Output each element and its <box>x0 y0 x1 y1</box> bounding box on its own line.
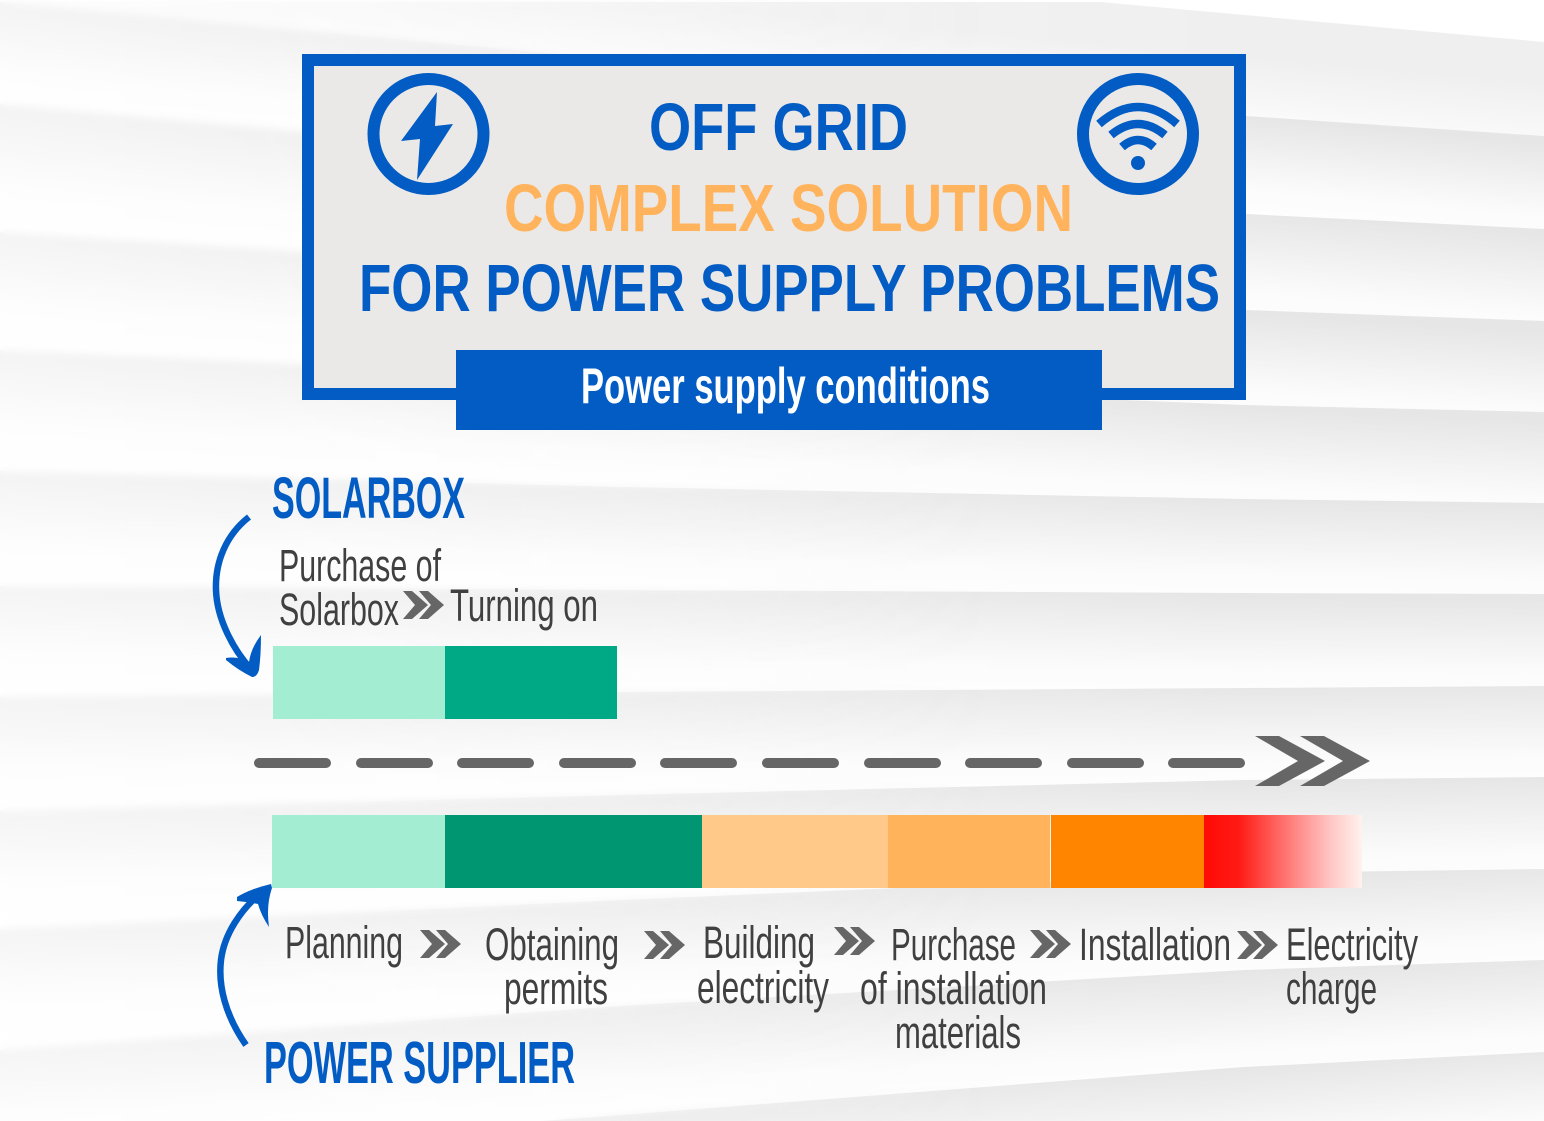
arrow: solarbox to bar <box>216 517 261 677</box>
chevron: after building electricity <box>834 927 875 955</box>
step label: building electricity: Building <box>703 917 815 968</box>
step label: obtaining permits: permits <box>504 963 608 1014</box>
chevron: purchase to turning on <box>403 591 444 619</box>
step label: turning on: Turning on <box>450 580 598 631</box>
step label: obtaining permits <box>485 919 619 1014</box>
banner: power supply conditions: Power supply conditions <box>581 358 990 414</box>
bar: solarbox purchase segment <box>273 646 445 719</box>
chevron: after planning <box>420 930 461 958</box>
step label: purchase of solarbox <box>279 540 441 635</box>
step label: electricity charge: Electricity <box>1286 919 1418 970</box>
step label: purchase of installation materials: Purchase <box>891 919 1016 970</box>
step label: installation: Installation <box>1079 919 1231 970</box>
step label: obtaining permits: Obtaining <box>485 919 619 970</box>
step label: purchase of installation materials <box>860 919 1047 1058</box>
icon: lightning bolt in circle <box>374 79 484 189</box>
heading: power supplier: POWER SUPPLIER <box>264 1030 575 1096</box>
dashed timeline arrow <box>254 736 1370 786</box>
step label: purchase of installation materials: materials <box>895 1007 1021 1058</box>
bar: power supplier stages <box>272 815 1362 888</box>
banner: power supply conditions <box>456 350 1102 430</box>
heading: solarbox: SOLARBOX <box>272 466 465 531</box>
step label: building electricity <box>697 917 829 1013</box>
title line: for power supply problems: FOR POWER SUPPLY PROBLEMS <box>359 251 1220 326</box>
panel: title box <box>308 60 1240 430</box>
step label: purchase of installation materials: of installation <box>860 963 1047 1014</box>
chevron: after obtaining permits <box>644 931 685 959</box>
title line: off grid: OFF GRID <box>649 90 908 165</box>
step label: purchase of solarbox: Purchase of <box>279 540 441 591</box>
step label: building electricity: electricity <box>697 962 829 1013</box>
arrow: power supplier to bar <box>220 884 272 1045</box>
chevron: after installation <box>1237 931 1278 959</box>
step label: purchase of solarbox: Solarbox <box>279 584 399 635</box>
icon: wifi in circle <box>1083 79 1193 189</box>
step label: planning: Planning <box>285 917 403 968</box>
step label: electricity charge <box>1286 919 1418 1014</box>
bar: solarbox turning on segment <box>445 646 617 719</box>
panel: power supplier timeline <box>220 815 1418 1096</box>
step label: electricity charge: charge <box>1286 963 1377 1014</box>
title line: complex solution: COMPLEX SOLUTION <box>504 171 1073 246</box>
chevron: after purchase of materials <box>1030 930 1071 958</box>
panel: solarbox timeline <box>216 466 617 719</box>
